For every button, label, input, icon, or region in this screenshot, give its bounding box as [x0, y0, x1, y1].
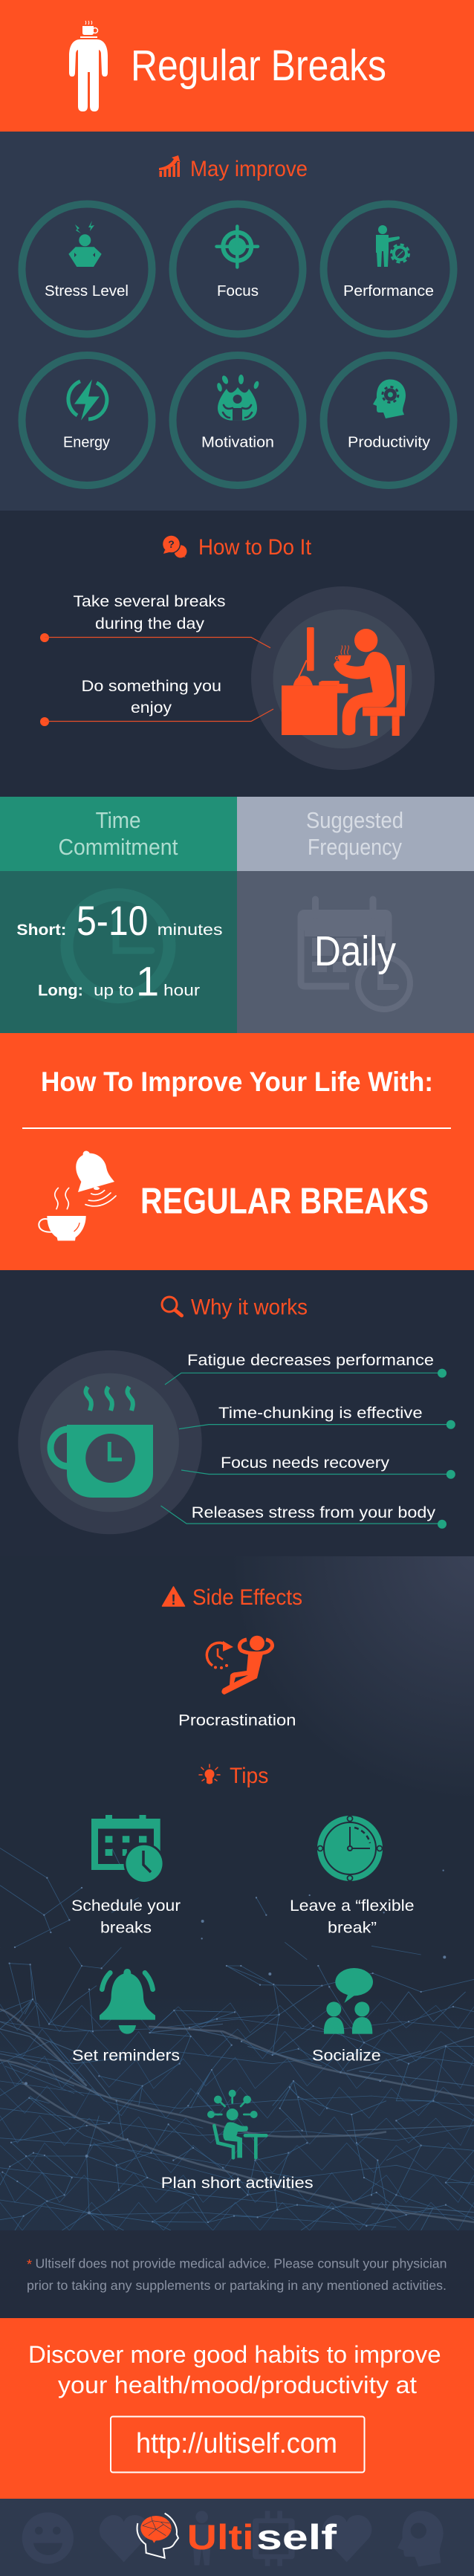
text: long duration	[38, 957, 200, 1005]
callout: focus needs recovery	[181, 1454, 455, 1479]
tip: set reminders	[72, 1969, 180, 2065]
metric: productivity: Productivity	[348, 434, 431, 451]
tip: schedule your breaks: Schedule your	[71, 1897, 181, 1915]
text: discover more: your health/mood/productivity at	[58, 2372, 417, 2398]
metric: performance	[324, 204, 453, 334]
logo: Ultiself: Ulti	[187, 2517, 254, 2557]
metric: energy	[22, 355, 152, 485]
panel: how to improve banner	[0, 1033, 474, 1270]
heading: time commitment	[58, 807, 178, 860]
callout: fatigue decreases performance	[165, 1352, 447, 1385]
panel: how to do it	[0, 511, 474, 797]
heading: why it works: Why it works	[191, 1295, 308, 1320]
metric: motivation	[172, 355, 303, 485]
tip: socialize: Socialize	[312, 2048, 381, 2065]
callout: releases stress from your body	[160, 1504, 447, 1529]
text: daily: Daily	[314, 928, 396, 975]
text: disclaimer: prior to taking any supplements or partaking in any mentioned activities.	[27, 2278, 447, 2293]
tip: socialize	[312, 1968, 381, 2065]
icon: rings and coffee mug with clock	[18, 1350, 202, 1534]
metric: stress level	[22, 204, 152, 334]
heading: how to improve your life: How To Improve Your Life With:	[41, 1067, 433, 1097]
heading: regular breaks: REGULAR BREAKS	[140, 1181, 429, 1221]
heading: tips: Tips	[230, 1764, 268, 1788]
heading: may improve	[159, 155, 308, 181]
callout: take several breaks	[40, 593, 270, 648]
metric: motivation: Motivation	[201, 434, 274, 451]
panel: call to action	[0, 2318, 474, 2499]
tip: set reminders: Set reminders	[72, 2048, 180, 2065]
text: long duration: up to	[94, 983, 134, 999]
callout: time-chunking is effective: Time-chunking is effective	[218, 1405, 423, 1422]
metric: performance: Performance	[343, 282, 434, 300]
panel: suggested frequency	[237, 797, 474, 1033]
icon: rings and person at desk with coffee	[251, 586, 435, 770]
callout: fatigue decreases performance: Fatigue decreases performance	[187, 1352, 434, 1369]
panel: disclaimer	[0, 2230, 474, 2318]
metric: focus	[172, 204, 303, 334]
tip: leave a flexible break	[290, 1816, 415, 1937]
metric: focus: Focus	[217, 282, 259, 300]
callout: do something you enjoy	[40, 678, 273, 726]
heading: may improve: May improve	[190, 157, 308, 181]
text: discover more	[28, 2341, 441, 2398]
callout: releases stress from your body: Releases stress from your body	[192, 1504, 436, 1521]
callout: time-chunking is effective	[179, 1405, 455, 1429]
icon: background calendar and clock	[298, 899, 410, 1009]
text: short duration	[16, 897, 223, 944]
text: discover more: Discover more good habits to improve	[28, 2341, 441, 2368]
text: short duration: Short:	[16, 922, 66, 939]
text: long duration: Long:	[38, 983, 83, 999]
tip: schedule your breaks: breaks	[100, 1920, 152, 1937]
metric: energy: Energy	[63, 434, 111, 451]
tip: plan short activities: Plan short activities	[161, 2175, 314, 2192]
icon: background clock	[67, 895, 169, 997]
callout: do something you enjoy: enjoy	[131, 699, 172, 716]
heading: suggested frequency: Frequency	[308, 834, 402, 860]
tip: leave a flexible break: Leave a “flexible	[290, 1897, 415, 1915]
panel: side effects and tips	[0, 1556, 474, 2230]
panel: why it works	[0, 1270, 474, 1556]
text: disclaimer: Ultiself does not provide medical advice. Please consult your physician	[36, 2256, 447, 2271]
button: website link: http://ultiself.com	[136, 2428, 337, 2459]
logo: Ultiself	[137, 2514, 337, 2558]
heading: side effects: !	[171, 1593, 176, 1608]
heading: side effects: Side Effects	[192, 1585, 302, 1610]
heading: tips	[199, 1764, 268, 1788]
callout: focus needs recovery: Focus needs recovery	[221, 1454, 390, 1472]
heading: suggested frequency	[306, 807, 403, 860]
panel: may improve	[0, 132, 474, 511]
tip: leave a flexible break: break”	[328, 1920, 377, 1937]
icon: person with coffee cup head	[69, 21, 108, 111]
button: website link	[111, 2417, 364, 2472]
logo: Ultiself: self	[256, 2517, 337, 2557]
background: network texture	[0, 1848, 474, 2230]
heading: how to do it: ?	[168, 538, 175, 550]
panel: header	[0, 0, 474, 132]
metric: productivity	[324, 355, 453, 485]
text: procrastination: Procrastination	[178, 1712, 296, 1729]
heading: suggested frequency: Suggested	[306, 807, 403, 833]
text: short duration: minutes	[158, 922, 223, 939]
callout: take several breaks: Take several breaks	[73, 593, 226, 610]
text: disclaimer	[27, 2256, 447, 2293]
callout: take several breaks: during the day	[95, 615, 205, 632]
panel: footer	[0, 2499, 474, 2576]
heading: time commitment: Commitment	[58, 834, 178, 860]
background: faded icons	[22, 2511, 444, 2566]
callout: do something you enjoy: Do something you	[82, 678, 221, 695]
metric: stress level: Stress Level	[45, 282, 129, 300]
text: long duration: 1	[136, 957, 159, 1005]
text: disclaimer: *	[27, 2257, 32, 2272]
icon: procrastination	[207, 1636, 272, 1695]
heading: time commitment: Time	[96, 807, 141, 833]
panel: time commitment	[0, 797, 237, 1033]
text: long duration: hour	[163, 983, 200, 999]
icon: bell and coffee cup	[39, 1151, 116, 1240]
tip: schedule your breaks	[71, 1815, 181, 1937]
tip: plan short activities	[161, 2090, 314, 2192]
text: short duration: 5-10	[77, 897, 149, 944]
heading: how to do it: How to Do It	[198, 535, 312, 560]
title: Regular Breaks	[131, 42, 386, 90]
